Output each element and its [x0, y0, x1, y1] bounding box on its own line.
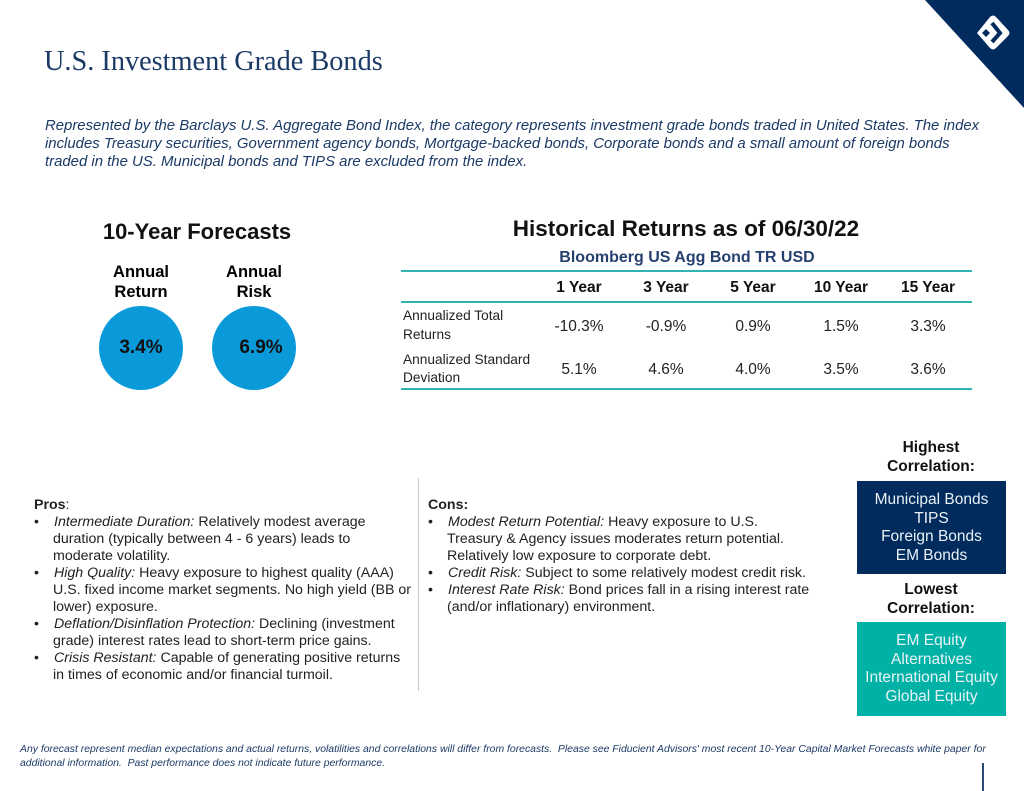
- footnote: additional information. Past performance does not indicate future performance.: [20, 758, 385, 768]
- panel: pros: moderate volatility.: [53, 548, 170, 564]
- box: highest correlation list: TIPS: [914, 510, 949, 527]
- panel: pros: •: [34, 514, 39, 530]
- historical returns table: -10.3%: [554, 318, 604, 335]
- title: U.S. Investment Grade Bonds: [44, 46, 383, 77]
- panel: pros: Pros:: [34, 497, 70, 513]
- label: annual risk: [226, 263, 282, 301]
- historical returns table: [401, 270, 972, 390]
- historical returns table: 10 Year: [814, 279, 868, 296]
- panel: pros: Deflation/Disinflation Protection: Declining (investment: [54, 616, 395, 632]
- heading: historical returns: Historical Returns as of 06/30/22: [513, 216, 859, 241]
- panel: pros: [34, 497, 411, 683]
- footnote: [20, 744, 986, 768]
- historical returns table: -0.9%: [646, 318, 686, 335]
- historical returns table: Returns: [403, 327, 451, 342]
- panel: cons: •: [428, 582, 433, 598]
- panel: cons: Modest Return Potential: Heavy exposure to U.S.: [448, 514, 758, 530]
- historical returns table: 1.5%: [823, 318, 859, 335]
- heading: highest correlation: Correlation:: [887, 458, 975, 474]
- panel: cons: •: [428, 514, 433, 530]
- label: annual return: Return: [114, 283, 168, 301]
- heading: 10-year forecasts: 10-Year Forecasts: [103, 219, 291, 244]
- table subtitle: Bloomberg US Agg Bond TR USD: [559, 249, 815, 266]
- panel: cons: [428, 497, 809, 615]
- description text: traded in the US. Municipal bonds and TIPS are excluded from the index.: [45, 153, 527, 170]
- panel: pros: lower) exposure.: [53, 599, 158, 615]
- label: annual return: [113, 263, 169, 301]
- corner logo: [925, 0, 1024, 108]
- panel: pros: •: [34, 616, 39, 632]
- panel: cons: (and/or inflationary) environment.: [447, 599, 655, 615]
- historical returns table: 4.0%: [735, 361, 771, 378]
- circle: annual return 3.4%: 3.4%: [119, 337, 163, 358]
- footnote: Any forecast represent median expectations and actual returns, volatilities and correlations will differ from forecasts. Please see Fiducient Advisors' most recent 10-Year Capital Market Forecasts white paper for: [20, 744, 986, 755]
- box: lowest correlation list: Global Equity: [885, 688, 978, 705]
- box: highest correlation list: [857, 481, 1006, 574]
- description text: [45, 117, 980, 170]
- historical returns table: Deviation: [403, 370, 460, 385]
- panel: cons: Treasury & Agency issues moderates return potential.: [447, 531, 784, 547]
- circle: annual risk 6.9%: 6.9%: [239, 337, 283, 358]
- panel: cons: •: [428, 565, 433, 581]
- historical returns table: Annualized Standard: [403, 352, 530, 367]
- circle: annual risk 6.9%: [212, 306, 296, 390]
- panel: pros: duration (typically between 4 - 6 years) leads to: [53, 531, 350, 547]
- panel: cons: Cons:: [428, 497, 468, 513]
- panel: pros: Intermediate Duration: Relatively modest average: [54, 514, 366, 530]
- panel: cons: Relatively low exposure to corporate debt.: [447, 548, 711, 564]
- label: annual return: Annual: [113, 263, 169, 281]
- heading: highest correlation: [887, 439, 975, 474]
- panel: pros: •: [34, 565, 39, 581]
- historical returns table: 3.5%: [823, 361, 859, 378]
- heading: lowest correlation: [887, 581, 975, 616]
- heading: highest correlation: Highest: [903, 439, 959, 456]
- box: highest correlation list: Municipal Bonds: [875, 491, 988, 508]
- historical returns table: 5 Year: [730, 279, 776, 296]
- description text: includes Treasury securities, Government agency bonds, Mortgage-backed bonds, Corporate bonds and a small amount of foreign bonds: [45, 135, 950, 152]
- historical returns table: 4.6%: [648, 361, 684, 378]
- historical returns table: Annualized Total: [403, 308, 503, 323]
- circle: annual return 3.4%: [99, 306, 183, 390]
- panel: cons: Interest Rate Risk: Bond prices fall in a rising interest rate: [448, 582, 809, 598]
- historical returns table: 1 Year: [556, 279, 602, 296]
- historical returns table: 3 Year: [643, 279, 689, 296]
- panel: cons: Credit Risk: Subject to some relatively modest credit risk.: [448, 565, 806, 581]
- box: lowest correlation list: Alternatives: [891, 651, 972, 668]
- panel: pros: in times of economic and/or financial turmoil.: [53, 667, 333, 683]
- historical returns table: 5.1%: [561, 361, 597, 378]
- panel: pros: U.S. fixed income market segments. No high yield (BB or: [53, 582, 411, 598]
- heading: lowest correlation: Lowest: [904, 581, 958, 598]
- box: lowest correlation list: EM Equity: [896, 632, 967, 649]
- panel: pros: High Quality: Heavy exposure to highest quality (AAA): [54, 565, 394, 581]
- box: highest correlation list: EM Bonds: [896, 547, 967, 564]
- panel: pros: grade) interest rates lead to short-term price gains.: [53, 633, 372, 649]
- historical returns table: 0.9%: [735, 318, 771, 335]
- box: lowest correlation list: International Equity: [865, 669, 998, 686]
- box: lowest correlation list: [857, 622, 1006, 716]
- historical returns table: 3.3%: [910, 318, 946, 335]
- panel: pros: •: [34, 650, 39, 666]
- label: annual risk: Annual: [226, 263, 282, 281]
- historical returns table: 3.6%: [910, 361, 946, 378]
- heading: lowest correlation: Correlation:: [887, 600, 975, 616]
- description text: Represented by the Barclays U.S. Aggregate Bond Index, the category represents investment grade bonds traded in United States. The index: [45, 117, 979, 134]
- panel: pros: Crisis Resistant: Capable of generating positive returns: [54, 650, 400, 666]
- label: annual risk: Risk: [237, 283, 271, 301]
- historical returns table: 15 Year: [901, 279, 955, 296]
- box: highest correlation list: Foreign Bonds: [881, 528, 982, 545]
